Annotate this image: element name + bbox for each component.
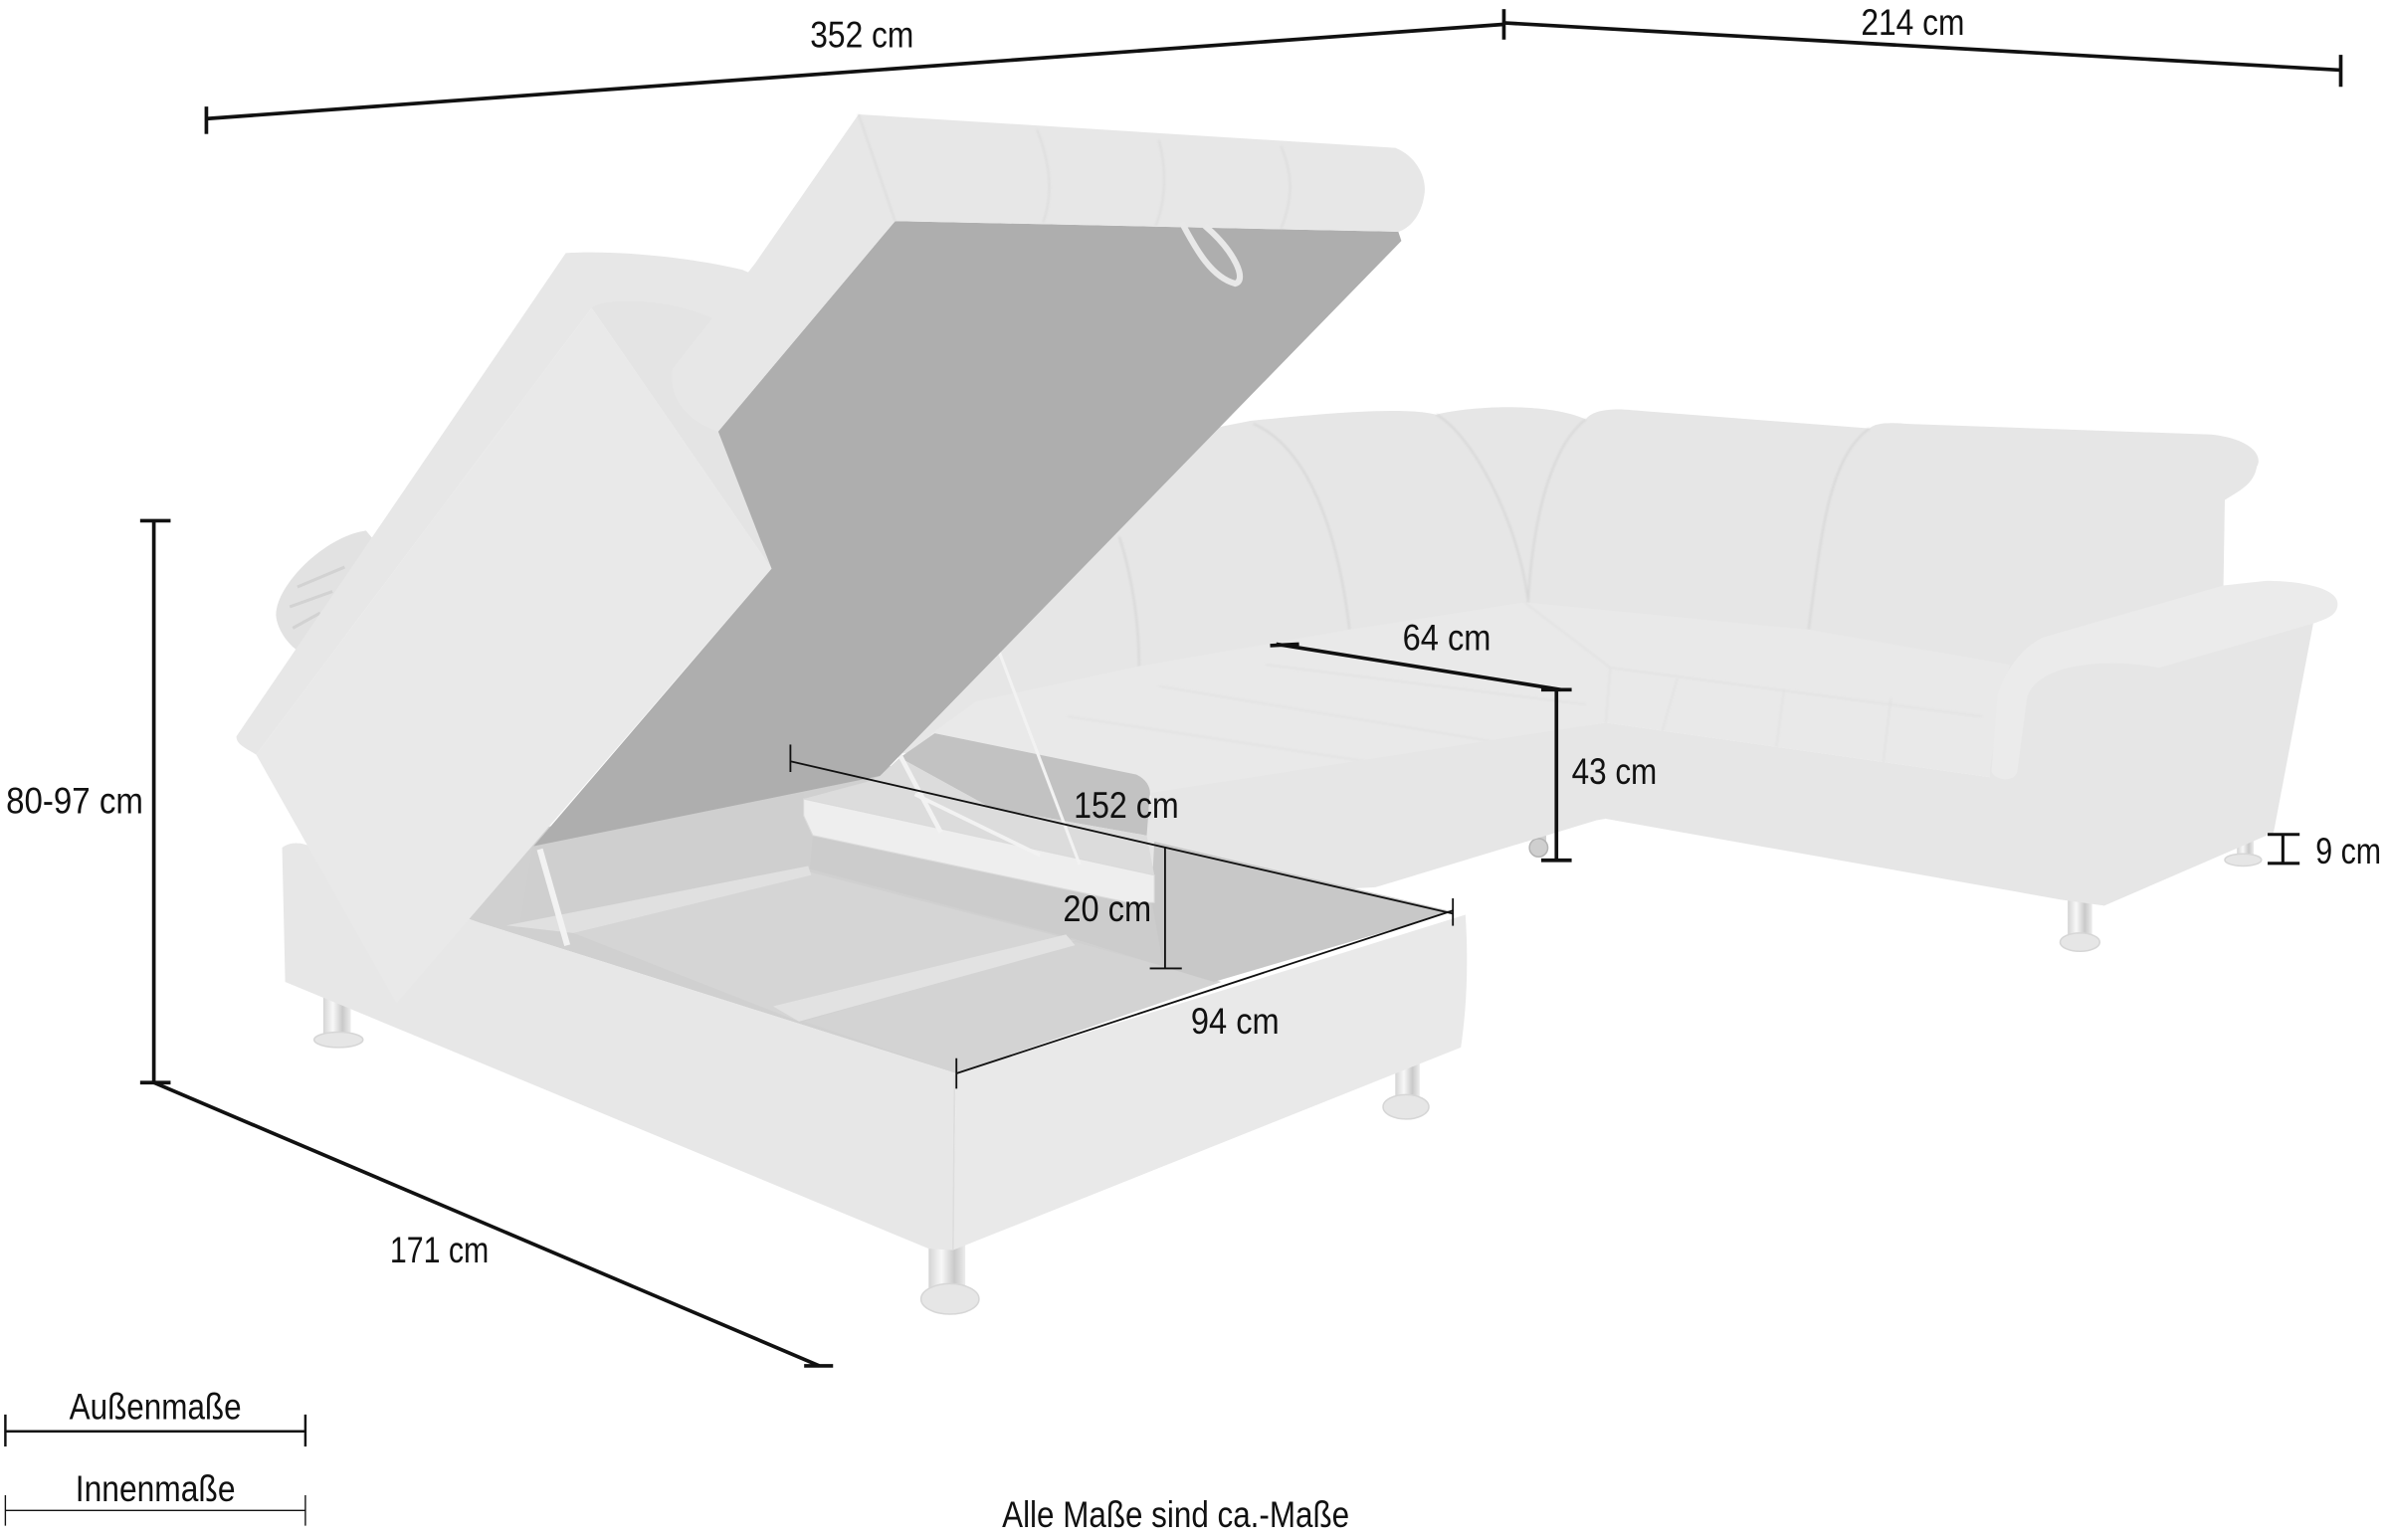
dimension: inner width 94 cm (956, 910, 1453, 1088)
sofa front walls (1136, 722, 2104, 905)
dimension: side width 214 cm (1503, 23, 2341, 87)
label: 171 cm: 171 cm (390, 1230, 489, 1270)
icon: sofa back legs (1529, 816, 2262, 951)
label: 20 cm: 20 cm (1063, 888, 1151, 929)
chaise interior walls and floor (450, 762, 1454, 1073)
pillow behind lid (276, 530, 381, 653)
label: 80-97 cm: 80-97 cm (6, 780, 143, 821)
chaise rear left leg (314, 991, 363, 1048)
note: all dimensions approximate: Alle Maße sind ca.-Maße (1002, 1494, 1349, 1535)
lid seams (859, 114, 1291, 229)
storage front strip (804, 799, 1154, 902)
label: 64 cm: 64 cm (1403, 618, 1491, 659)
armrest top roll (1992, 581, 2337, 779)
dimension: seat height 43 cm (1541, 689, 1572, 861)
lid strap (1182, 223, 1240, 284)
dimension: depth 171 cm (154, 1082, 833, 1366)
armrest side panel (1990, 587, 2313, 905)
legend: outer dimensions: Außenmaße (70, 1386, 242, 1427)
backrest: right section (893, 407, 2259, 755)
legend: outer dimensions (5, 1386, 305, 1446)
back of the storage box (804, 758, 1154, 875)
label: 94 cm: 94 cm (1191, 1001, 1280, 1042)
chaise base outer walls (283, 843, 1467, 1251)
gas struts (540, 651, 1080, 945)
sofa illustration (237, 114, 2337, 1314)
dark seat end cushion (899, 733, 1150, 836)
label: 352 cm: 352 cm (810, 14, 913, 55)
seat cushions (930, 602, 2010, 796)
lid upholstered roll (672, 114, 1425, 432)
storage slats (506, 866, 1075, 1022)
raised side panel (256, 308, 771, 1003)
dimension: inner depth 20 cm (1150, 847, 1182, 968)
seat seams (1068, 602, 1982, 762)
raised backrest roll (237, 253, 770, 755)
dimension: seat depth 64 cm (1271, 644, 1572, 689)
chaise front right leg (1383, 1052, 1429, 1119)
dimension: leg height 9 cm (2268, 835, 2299, 864)
lid underside (533, 221, 1401, 847)
label: 214 cm: 214 cm (1861, 2, 1964, 43)
backrest seams (1119, 415, 1870, 667)
dimension: total width 352 cm (206, 9, 1503, 134)
dimension: inner length 152 cm (790, 744, 1453, 926)
label: 152 cm: 152 cm (1074, 785, 1179, 826)
legend: inner dimensions (5, 1468, 305, 1526)
chaise front leg (921, 1228, 979, 1314)
label: 43 cm: 43 cm (1572, 751, 1657, 792)
dimension: height 80-97 cm (140, 520, 170, 1082)
legend: inner dimensions: Innenmaße (76, 1468, 236, 1509)
